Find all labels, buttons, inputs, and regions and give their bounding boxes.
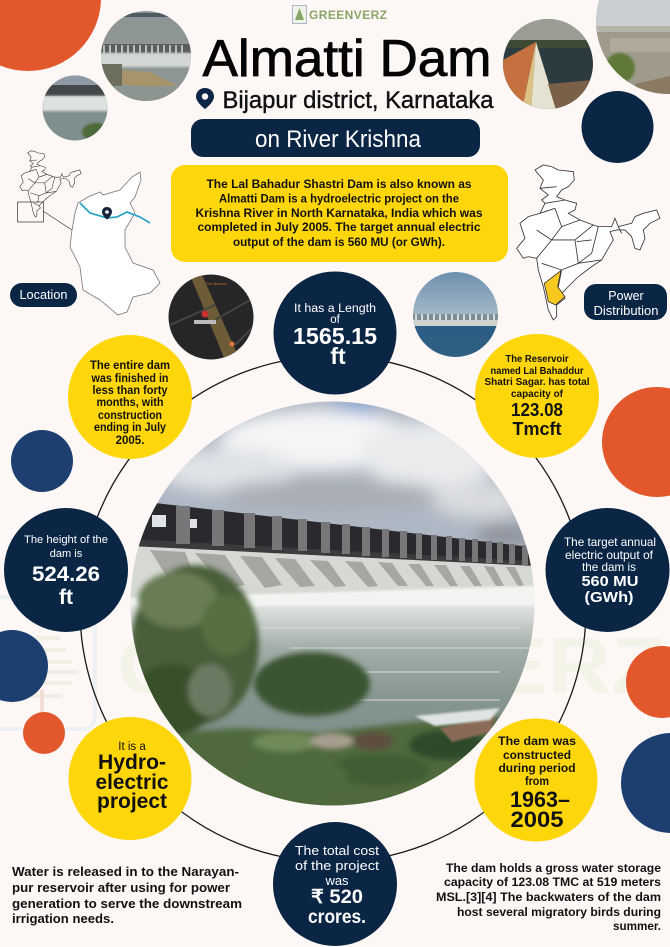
ring connector [80,356,586,862]
photo: canal road [503,19,593,110]
text: water release: pur reservoir after using for power [12,880,230,895]
circle: electric output [546,508,670,632]
circle: cost: was [324,873,349,888]
decorative circle: navy left [11,430,73,492]
intro text box [171,165,508,262]
circle: reservoir capacity: named Lal Bahaddur [490,365,584,377]
circle: construction duration: was finished in [91,373,168,385]
circle: construction period: constructed [503,750,571,762]
intro text box: Almatti Dam is a hydroelectric project on the [219,194,459,206]
circle: height: ft [59,586,73,609]
sky [130,400,536,560]
circle: construction period [474,718,598,842]
text: water release: generation to serve the downstream [12,896,242,911]
circle: construction duration: less than forty [92,385,168,397]
circle: construction period: 1963– [510,787,570,812]
circle: cost: The total cost [295,843,379,858]
circle: hydroelectric: Hydro- [98,751,166,774]
water [130,592,536,812]
intro text box: completed in July 2005. The target annual electric [198,222,481,234]
photo: dam gates [42,75,110,141]
intro text box: The Lal Bahadur Shastri Dam is also known as [206,179,472,191]
decorative circle: small orange left [23,712,65,754]
text: storage capacity: host several migratory birds during [457,905,661,919]
text: storage capacity: MSL.[3][4] The backwaters of the dam [436,890,661,904]
circle: construction duration: 2005. [116,435,144,447]
decorative circle: navy top-right [582,91,654,163]
watermark: GREENVERZ [117,621,665,710]
map: Karnataka state [70,172,160,315]
circle: length: 1565.15 [293,323,377,349]
central photo: Almatti Dam spillway [130,399,540,812]
circle: length: ft [330,343,346,369]
photo: spillway aerial [100,10,192,102]
spillway [130,546,534,599]
text: water release: irrigation needs. [12,911,114,926]
circle: reservoir capacity [475,334,599,458]
circle: hydroelectric: project [97,790,167,813]
text: storage capacity: The dam holds a gross water storage [446,861,661,875]
Karnataka highlight [544,271,565,305]
tag: location: Location [20,288,68,302]
circle: construction period: 2005 [510,807,564,832]
map: India with Karnataka highlighted [517,165,660,320]
logo: GREENVERZ [309,8,387,22]
circle: reservoir capacity: capacity of [511,388,563,400]
circle: cost [273,822,397,946]
circle: electric output: electric output of [565,548,654,562]
circle: height: dam is [50,548,83,560]
photo: reservoir [413,272,499,358]
tag: location [10,283,77,307]
circle: cost: of the project [295,858,379,873]
circle: electric output: (GWh) [584,589,634,606]
gates band [130,500,530,563]
text: storage capacity [436,861,661,933]
decorative circle: orange lower right [626,646,670,718]
banner: river [191,119,480,157]
decorative circle: orange top-left [0,0,101,71]
subtitle location: Bijapur district, Karnataka [222,87,494,114]
watermark [0,597,665,729]
circle: hydroelectric: electric [96,771,169,794]
circle: construction period: The dam was [498,736,576,748]
icon: map pin [102,207,112,220]
circle: reservoir capacity: Tmcft [512,419,562,439]
circle: reservoir capacity: Shatri Sagar. has total [484,376,590,388]
circle: electric output: the dam is [582,560,636,574]
title: Almatti Dam [202,30,492,88]
banner: river: on River Krishna [255,126,422,153]
circle: construction period: during period [498,763,576,775]
text: storage capacity: summer. [613,919,661,933]
circle: construction duration: construction [98,410,162,422]
tag: power distribution: Power [608,289,644,303]
circle: hydroelectric [68,717,192,840]
decorative circle: blue lower right [621,733,670,833]
circle: length: It has a Length [294,303,376,315]
photo: night map: Sree Bhavani [205,282,227,286]
river line [80,203,150,223]
text: water release: Water is released in to the Narayan- [12,864,239,879]
circle: construction period: from [525,776,549,788]
circle: hydroelectric: It is a [118,741,146,753]
circle: construction duration: The entire dam [90,360,170,372]
photo: night map [168,274,255,360]
tree [130,565,259,736]
bush [254,652,370,716]
circle: construction duration: months, with [96,397,164,409]
circle: construction duration: ending in July [94,422,167,434]
intro text box: Krishna River in North Karnataka, India which was [196,208,482,220]
intro text box: output of the dam is 560 MU (or GWh). [233,237,445,249]
text: storage capacity: capacity of 123.08 TMC at 519 meters [444,875,661,889]
text: water release [12,864,242,926]
logo [292,6,387,24]
decorative circle: orange right [602,387,670,497]
circle: reservoir capacity: The Reservoir [506,353,568,365]
tag: power distribution: Distribution [594,304,659,318]
circle: cost: ₹ 520 [311,887,363,908]
circle: reservoir capacity: 123.08 [511,400,563,420]
circle: construction duration [68,335,192,459]
circle: height: The height of the [24,534,108,546]
map: India small with Karnataka inset [18,151,81,230]
circle: length [274,272,396,394]
tag: power distribution [584,284,667,320]
circle: length: of [330,314,341,326]
decorative circle: blue left [0,630,48,702]
circle: cost: crores. [308,907,366,928]
circle: electric output: The target annual [564,535,656,549]
circle: height: 524.26 [32,563,100,586]
circle: electric output: 560 MU [582,573,638,590]
circle: height [4,508,128,632]
foreground bank [175,712,502,806]
photo: power station [595,0,670,95]
